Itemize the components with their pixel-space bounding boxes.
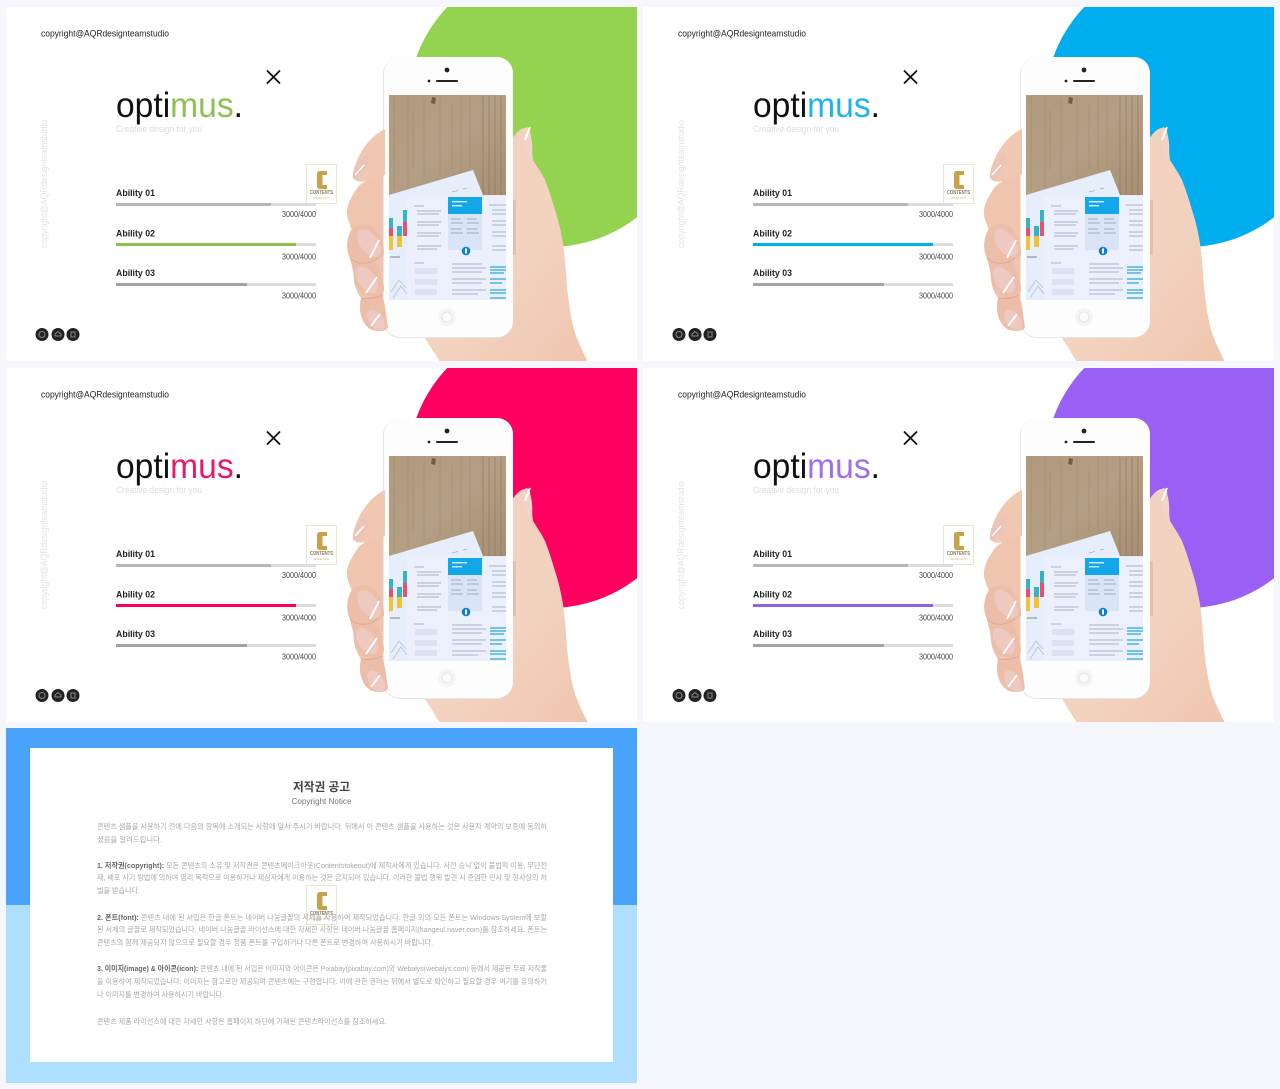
copyright line: copyright@AQRdesignteamstudio	[678, 390, 806, 400]
close icon	[267, 70, 280, 84]
ability 01: Ability 01	[753, 549, 793, 560]
close icon	[904, 70, 917, 84]
notice body text: 을 이용하여 제작되었습니다. 이미지는 참고로만 제공되며 콘텐츠에는 구현합니다. 이에 관한 권리는 뒤에서 별도로 확인하고 필요할 경우 여기를 유의하거	[97, 976, 547, 986]
notice body text: 2. 폰트(font): 콘텐츠 내에 된 서입은 한글 폰트는 네이버 나눔글꼴의 서체를 사용하여 제작되었습니다. 한글 외의 모든 폰트는 Windows System에 보할	[97, 912, 547, 922]
panel: blue slide	[643, 7, 1274, 361]
panel: copyright notice	[6, 728, 637, 1083]
panel: purple slide	[643, 368, 1274, 722]
ability 01: 3000/4000	[282, 210, 316, 219]
notice white card	[30, 748, 613, 1062]
ability 02: Ability 02	[116, 590, 155, 600]
title: optimus.	[753, 447, 880, 486]
notice body text: 된 서체의 글꼴로 제작되었습니다. 네이버 나눔글꼴 라이선스에 대한 자세한 사항은 네이버 나눔글꼴 홈페이지(hangeul.naver.com)를 참조하세요. 폰트는	[97, 924, 547, 934]
panel: green slide	[6, 7, 637, 361]
logo stamp	[306, 886, 336, 924]
accent circle	[1045, 0, 1280, 247]
ability 03: 3000/4000	[282, 652, 316, 662]
copyright line: copyright@AQRdesignteamstudio	[41, 28, 169, 40]
vertical copyright: copyright@AQRdesignteamstudio	[676, 481, 687, 609]
panel: crimson slide	[6, 368, 637, 722]
logo stamp	[306, 526, 336, 564]
accent circle	[408, 0, 692, 247]
ability 02	[753, 590, 953, 622]
notice body text: 재, 배포 사기 방법에 의하여 영리 목적으로 이용하거나 제삼자에게 이용하는 것은 금지되어 있습니다. 이러한 불법 행위 발견 시 준엄한 민사 및 형사상의 처	[97, 872, 547, 882]
accent circle	[408, 324, 692, 608]
ability 03: 3000/4000	[919, 292, 953, 300]
ability 03: Ability 03	[116, 268, 155, 279]
subtitle: Creative design for you	[116, 485, 202, 496]
ability 01: Ability 01	[116, 188, 156, 199]
ability 02: Ability 02	[753, 590, 792, 600]
notice subheading: Copyright Notice	[292, 796, 352, 806]
notice body text: 1. 저작권(copyright): 모든 콘텐츠의 소유 및 저작권은 콘텐츠메이크아웃(Contentstokeout)에 제작사에게 있습니다. 사전 승낙 없이 불법적 이용, 무단전	[97, 860, 547, 870]
phone in hand	[347, 418, 588, 723]
notice body text: 콘텐츠 제품 라이선스에 대한 자세한 사항은 홈페이지 하단에 기재된 콘텐츠라이선스를 참조하세요.	[97, 1016, 387, 1026]
copyright line: copyright@AQRdesignteamstudio	[41, 390, 169, 400]
ability 01	[116, 549, 316, 580]
notice body text: 벌을 받습니다.	[97, 885, 140, 895]
ability 03	[116, 268, 316, 300]
vertical copyright: copyright@AQRdesignteamstudio	[676, 120, 687, 248]
vertical copyright: copyright@AQRdesignteamstudio	[39, 120, 50, 248]
logo stamp	[306, 164, 336, 204]
ability 02: Ability 02	[116, 228, 155, 240]
phone in hand	[984, 57, 1225, 362]
ability 01	[116, 188, 316, 219]
ability 03: 3000/4000	[282, 292, 316, 300]
ability 03: 3000/4000	[919, 652, 953, 662]
ability 03: Ability 03	[753, 629, 792, 640]
notice body text: 3. 이미지(image) & 아이콘(icon): 콘텐츠 내에 된 서입은 이미지와 아이콘은 Pixabay(pixabay.com)와 Webalys(webalys.com) 등에서 제공된 무료 저작물	[97, 963, 547, 973]
copyright line: copyright@AQRdesignteamstudio	[678, 28, 806, 40]
notice body text: 콘텐츠의 함께 제공되지 않으므로 필요할 경우 정품 폰트를 구입하거나 다른 폰트로 변경하여 사용하시기 바랍니다.	[97, 937, 433, 947]
ability 01: 3000/4000	[919, 210, 953, 219]
notice background top band	[6, 728, 637, 905]
notice body text: 나 이미지를 변경하여 사용하시기 바랍니다.	[97, 989, 224, 999]
ability 03	[116, 629, 316, 662]
ability 02: 3000/4000	[282, 252, 316, 262]
notice background bottom band	[6, 905, 637, 1083]
ability 01	[753, 549, 953, 580]
phone in hand	[347, 57, 588, 362]
ability 03	[753, 268, 953, 300]
title: optimus.	[753, 86, 880, 125]
ability 02: 3000/4000	[919, 614, 953, 622]
ability 01: 3000/4000	[282, 571, 316, 580]
subtitle: Creative design for you	[116, 124, 202, 135]
close icon	[267, 432, 280, 444]
ability 01: Ability 01	[116, 549, 156, 560]
subtitle: Creative design for you	[753, 485, 839, 496]
ability 01	[753, 188, 953, 219]
accent circle	[1045, 324, 1280, 608]
ability 03: Ability 03	[116, 629, 155, 640]
social icons	[672, 689, 716, 702]
ability 02	[753, 228, 953, 262]
ability 02: 3000/4000	[919, 252, 953, 262]
ability 02: 3000/4000	[282, 614, 316, 622]
title: optimus.	[116, 86, 243, 125]
social icons	[36, 328, 80, 341]
logo stamp	[944, 164, 974, 204]
phone in hand	[984, 418, 1225, 723]
vertical copyright: copyright@AQRdesignteamstudio	[39, 481, 50, 609]
social icons	[672, 328, 716, 341]
social icons	[36, 689, 80, 702]
logo stamp	[944, 526, 974, 564]
title: optimus.	[116, 447, 243, 486]
subtitle: Creative design for you	[753, 124, 839, 135]
notice body text: 콘텐츠 샘플을 사용하기 전에 다음의 항목에 소개되는 사항에 앞서 주시기 바랍니다. 뒤에서 이 콘텐츠 샘플을 사용하는 것은 사용자 계약의 보증에 동의하	[97, 821, 547, 831]
ability 01: Ability 01	[753, 188, 793, 199]
notice body text: 셨음을 알려드립니다.	[97, 834, 162, 844]
ability 03: Ability 03	[753, 268, 792, 279]
ability 02: Ability 02	[753, 228, 792, 240]
ability 03	[753, 629, 953, 662]
notice heading: 저작권 공고	[293, 779, 350, 794]
ability 02	[116, 228, 316, 262]
ability 02	[116, 590, 316, 622]
notice body text	[97, 821, 547, 1026]
close icon	[904, 432, 917, 444]
ability 01: 3000/4000	[919, 571, 953, 580]
